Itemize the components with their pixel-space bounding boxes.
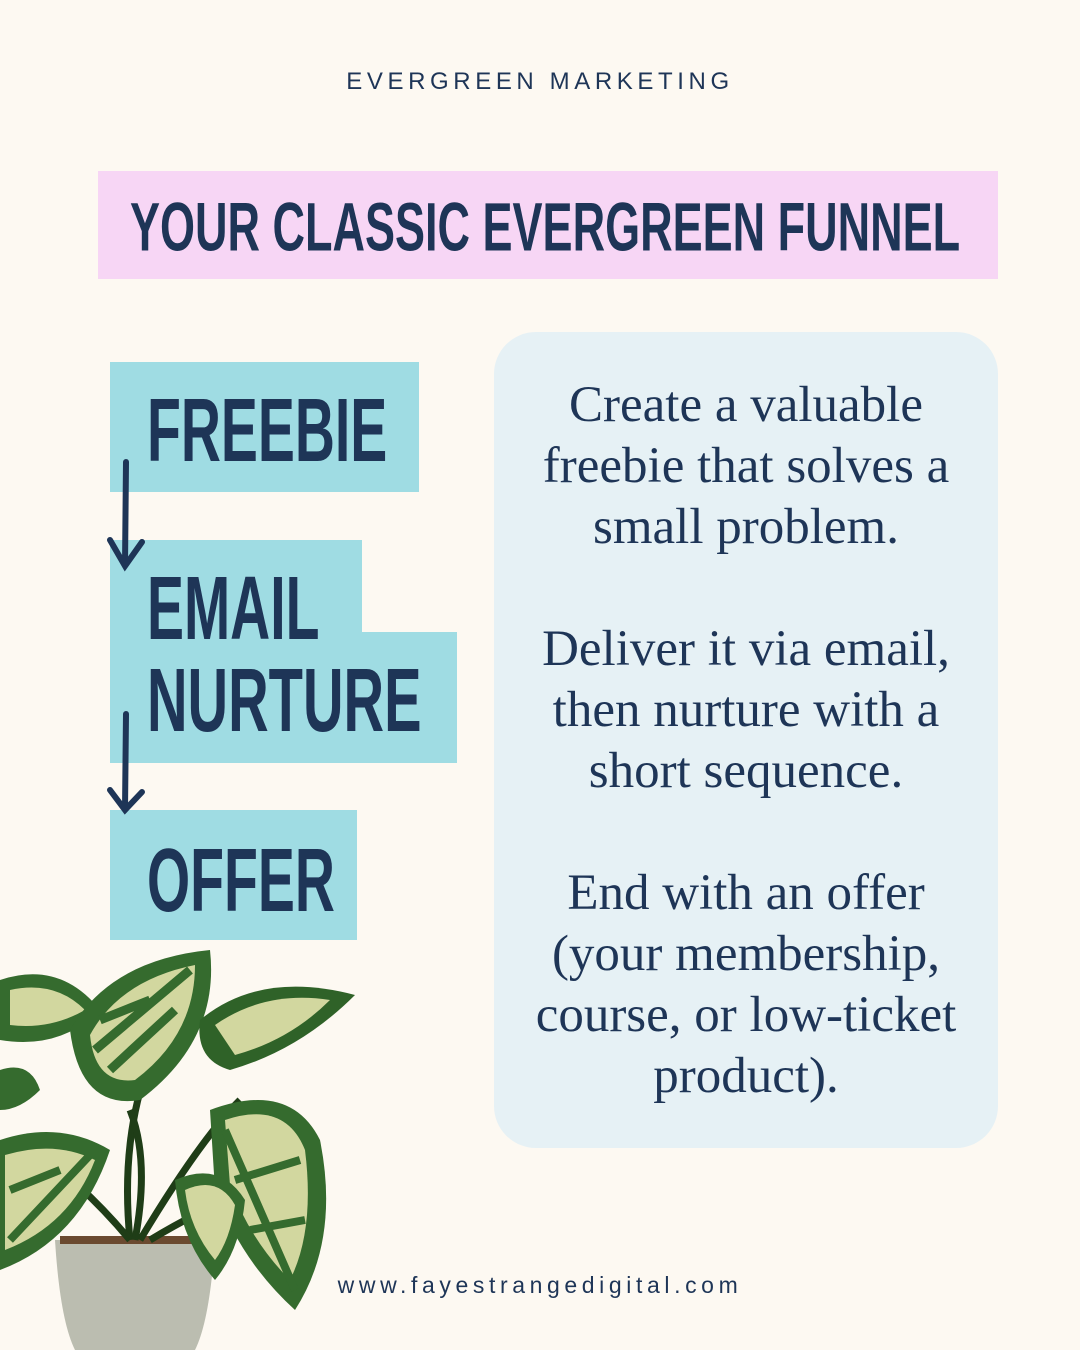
- description text: course, or low-ticket: [536, 987, 956, 1043]
- step: freebie: [110, 362, 419, 492]
- description text: small problem.: [593, 499, 899, 555]
- description text: short sequence.: [589, 743, 903, 799]
- description text: [536, 377, 956, 1104]
- label freebie: FREEBIE: [147, 381, 387, 481]
- description text: (your membership,: [552, 926, 940, 982]
- footer url: www.fayestrangedigital.com: [338, 1272, 742, 1298]
- arrow 2: [107, 711, 145, 815]
- description text: product).: [653, 1048, 839, 1104]
- label nurture: NURTURE: [147, 651, 422, 751]
- illustration: potted plant: [0, 950, 355, 1350]
- step: email nurture: [110, 540, 457, 763]
- label offer: OFFER: [147, 831, 335, 931]
- title banner: [98, 171, 998, 279]
- description panel: [494, 332, 998, 1148]
- header: EVERGREEN MARKETING: [346, 68, 734, 95]
- title banner: YOUR CLASSIC EVERGREEN FUNNEL: [130, 188, 960, 265]
- label email: EMAIL: [147, 559, 319, 659]
- description text: Create a valuable: [569, 377, 923, 433]
- description text: then nurture with a: [553, 682, 939, 738]
- description text: Deliver it via email,: [542, 621, 950, 677]
- description text: End with an offer: [567, 865, 925, 921]
- description text: freebie that solves a: [543, 438, 949, 494]
- arrow 1: [107, 459, 145, 572]
- step: offer: [110, 810, 357, 940]
